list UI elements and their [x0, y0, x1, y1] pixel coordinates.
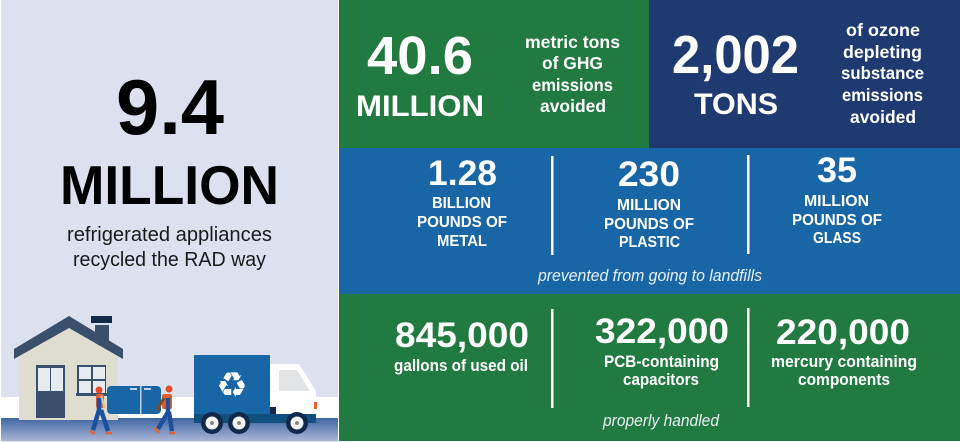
panel: hazardous materials handled	[339, 294, 960, 441]
stat: plastic: MILLION	[617, 197, 681, 214]
description: avoided	[850, 107, 916, 127]
stat: metal: 1.28	[428, 154, 497, 193]
description: metric tons	[525, 32, 620, 52]
stat: plastic: 230	[618, 155, 680, 194]
panel: total appliances	[1, 0, 338, 442]
description	[67, 224, 272, 271]
panel: landfill diversion	[339, 148, 960, 294]
description: refrigerated appliances	[67, 224, 272, 246]
icon: house	[14, 316, 123, 420]
icon: refrigerator being carried	[107, 386, 161, 414]
stat: capacitors	[595, 312, 729, 389]
stat: metal: METAL	[437, 233, 487, 250]
illustration: house, movers and recycling truck	[1, 316, 338, 441]
caption: prevented from going to landfills	[537, 266, 762, 285]
stat: 40.6 million: 40.6	[367, 26, 473, 86]
description: recycled the RAD way	[73, 249, 266, 271]
stat: 40.6 million: MILLION	[356, 90, 484, 123]
icon: recycling truck	[194, 355, 317, 434]
stat: 2,002 tons: 2,002	[672, 25, 799, 85]
headline unit: MILLION	[60, 154, 279, 216]
stat: glass: 35	[817, 151, 857, 190]
stat: plastic: POUNDS OF	[604, 216, 694, 233]
stat: capacitors: PCB-containing	[604, 352, 719, 371]
description: substance	[841, 63, 924, 83]
stat: metal	[417, 154, 507, 250]
stat: mercury components	[771, 313, 917, 389]
stat: plastic	[604, 155, 694, 251]
description: depleting	[843, 42, 922, 62]
stat: glass	[792, 151, 882, 247]
description: of GHG	[542, 53, 603, 73]
icon: mover right	[155, 386, 175, 433]
description: of ozone	[846, 20, 920, 40]
stat: used oil: 845,000	[395, 316, 529, 355]
panel: GHG emissions avoided	[339, 0, 649, 148]
description	[841, 20, 924, 127]
stat: mercury components: 220,000	[776, 313, 910, 352]
description	[525, 32, 620, 116]
stat: 2,002 tons	[672, 25, 799, 121]
panel: ozone depleting substances avoided	[649, 0, 960, 148]
stat: capacitors: capacitors	[623, 370, 699, 389]
stat: metal: POUNDS OF	[417, 214, 507, 231]
stat: glass: GLASS	[813, 230, 861, 247]
headline number: 9.4	[116, 63, 224, 151]
description: emissions	[532, 75, 613, 95]
stat: 40.6 million	[356, 26, 484, 123]
stat: glass: MILLION	[804, 193, 869, 210]
caption: properly handled	[602, 411, 719, 430]
stat: mercury components: mercury containing	[771, 352, 917, 371]
description: emissions	[842, 85, 923, 105]
stat: used oil	[394, 316, 529, 375]
description: avoided	[540, 96, 606, 116]
icon: recycling symbol: ♻	[216, 366, 248, 406]
icon: mover left	[90, 386, 112, 434]
stat: used oil: gallons of used oil	[394, 356, 528, 375]
stat: glass: POUNDS OF	[792, 212, 882, 229]
stat: mercury components: components	[798, 370, 890, 389]
stat: 2,002 tons: TONS	[694, 88, 778, 121]
stat: capacitors: 322,000	[595, 312, 729, 351]
stat: metal: BILLION	[432, 195, 491, 212]
stat: plastic: PLASTIC	[619, 234, 680, 251]
